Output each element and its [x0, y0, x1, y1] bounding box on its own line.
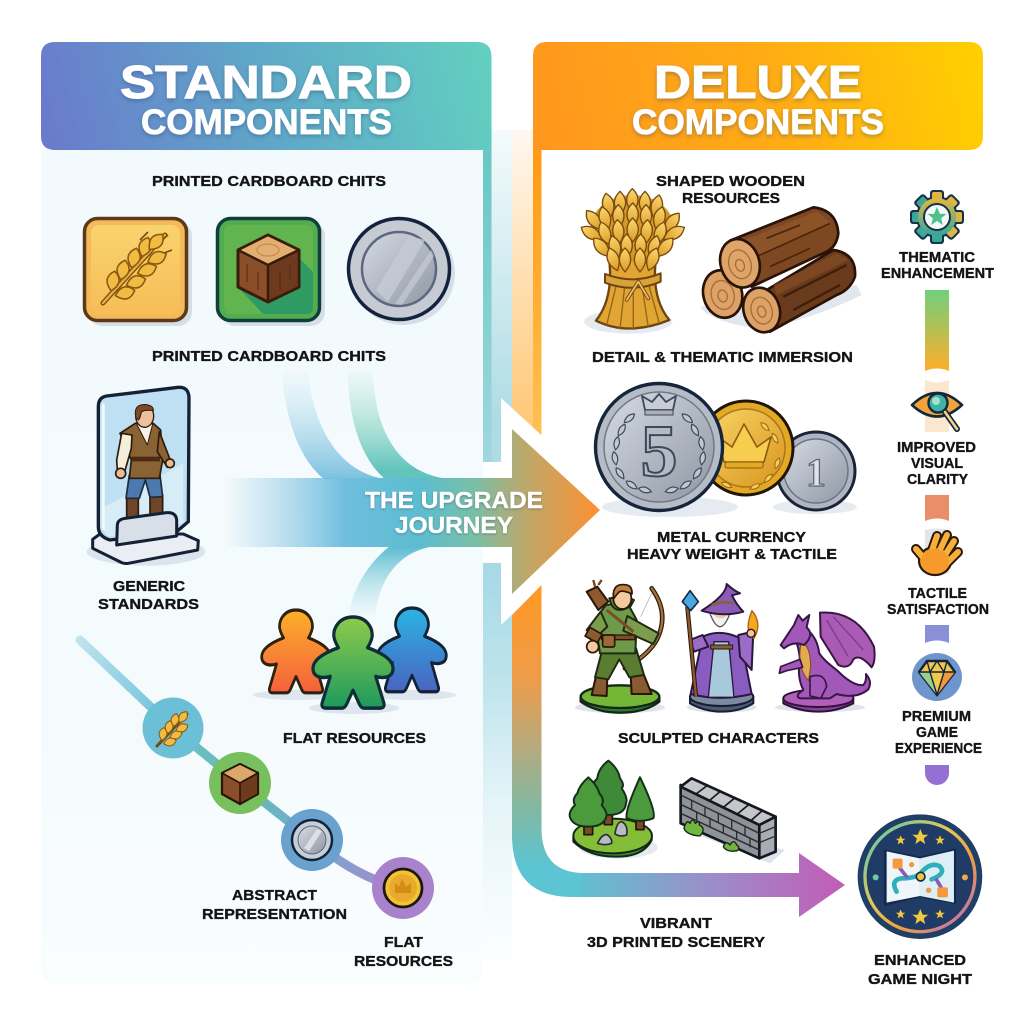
header: standard components [41, 42, 492, 150]
label: enhanced game night: ENHANCED [874, 952, 966, 969]
label: flat resources bottom [354, 934, 453, 970]
coin: silver five: 5 [640, 411, 678, 493]
label: detail and thematic immersion: DETAIL & THEMATIC IMMERSION [592, 349, 853, 366]
icon: silver chit [348, 218, 455, 325]
icon: archer miniature [575, 580, 665, 713]
label: flat resources bottom: FLAT [384, 934, 423, 951]
coin: small silver [777, 432, 855, 510]
coin: silver five [596, 384, 722, 510]
label: thematic enhancement [881, 250, 994, 282]
label: premium game experience: EXPERIENCE [895, 741, 982, 757]
label: shaped wooden resources [656, 173, 805, 207]
node: wood [209, 752, 271, 814]
coin: small silver: 1 [806, 450, 826, 495]
label: metal currency: HEAVY WEIGHT & TACTILE [627, 546, 837, 563]
label: vibrant 3d printed scenery: VIBRANT [640, 915, 712, 932]
label: improved visual clarity: VISUAL [911, 456, 963, 472]
channel: orange upper strip [512, 130, 542, 440]
node: silver coin [281, 809, 343, 871]
connector: violet bar three [925, 625, 949, 643]
label: flat resources bottom: RESOURCES [354, 953, 453, 970]
channel: teal lower strip [483, 563, 512, 960]
icon: wizard miniature [682, 584, 758, 713]
icon: meeples [253, 608, 456, 714]
label: abstract representation [202, 887, 347, 923]
header: standard components: COMPONENTS [141, 103, 392, 142]
header: standard components: STANDARD [120, 56, 412, 108]
icon: dragon miniature [775, 612, 875, 712]
panel: standard components background [41, 150, 483, 984]
label: printed cardboard chits: PRINTED CARDBOARD CHITS [152, 173, 386, 190]
icon: wheat chit [84, 218, 192, 326]
connector: orange bar two [925, 495, 949, 521]
icon: premium diamond [912, 653, 962, 701]
icon: stone wall scenery [681, 778, 785, 863]
label: improved visual clarity [897, 440, 976, 488]
arrow: the upgrade journey: JOURNEY [395, 512, 513, 538]
label: premium game experience: PREMIUM [902, 709, 971, 725]
label: metal currency: METAL CURRENCY [657, 529, 806, 546]
arrow: bottom curve to enhanced game night [512, 585, 845, 917]
coin: gold crown [699, 401, 793, 495]
arrow: the upgrade journey [225, 429, 600, 594]
label: improved visual clarity: CLARITY [907, 472, 968, 488]
node: gold coin [372, 857, 434, 919]
header: deluxe components: DELUXE [654, 56, 862, 108]
icon: generic standee [87, 387, 205, 566]
label: enhanced game night [868, 952, 972, 988]
label: tactile satisfaction: TACTILE [908, 586, 967, 602]
header: deluxe components: COMPONENTS [632, 103, 884, 142]
label: shaped wooden resources: RESOURCES [682, 190, 780, 207]
label: generic standards [98, 578, 199, 613]
label: shaped wooden resources: SHAPED WOODEN [656, 173, 805, 190]
flow: converging streams [282, 372, 450, 615]
icon: tactile hand [916, 528, 958, 576]
label: tactile satisfaction [887, 586, 989, 618]
label: printed cardboard chits second: PRINTED CARDBOARD CHITS [152, 348, 386, 365]
connector: purple bar four [925, 765, 949, 785]
icon: metal coins [596, 384, 857, 517]
label: flat resources: FLAT RESOURCES [283, 730, 426, 747]
connector: gradient bar one [925, 290, 949, 371]
arrow: the upgrade journey: THE UPGRADE [365, 487, 543, 513]
icon: wheat sheaf [578, 189, 687, 334]
icon: gear with star [910, 190, 964, 244]
label: metal currency [627, 529, 837, 563]
icon: eye with magnifier [912, 380, 962, 432]
label: vibrant 3d printed scenery: 3D PRINTED SCENERY [587, 934, 765, 951]
label: improved visual clarity: IMPROVED [897, 440, 976, 456]
node: wheat [142, 698, 204, 758]
label: abstract representation: ABSTRACT [232, 887, 317, 904]
label: premium game experience: GAME [916, 725, 958, 741]
label: thematic enhancement: THEMATIC [899, 250, 976, 266]
label: vibrant 3d printed scenery [587, 915, 765, 951]
label: abstract representation: REPRESENTATION [202, 906, 347, 923]
label: sculpted characters: SCULPTED CHARACTERS [618, 730, 819, 747]
chart: resource timeline [80, 640, 434, 919]
arrow: white outline chevron [501, 398, 623, 625]
icon: enhanced game night badge [858, 814, 982, 939]
label: thematic enhancement: ENHANCEMENT [881, 266, 994, 282]
icon: forest scenery [570, 761, 658, 859]
label: generic standards: GENERIC [113, 578, 185, 595]
icon: wood chit [218, 218, 325, 326]
label: generic standards: STANDARDS [98, 596, 199, 613]
label: enhanced game night: GAME NIGHT [868, 971, 972, 988]
label: tactile satisfaction: SATISFACTION [887, 602, 989, 618]
header: deluxe components [533, 42, 983, 150]
label: premium game experience [895, 709, 982, 757]
icon: wooden logs [698, 207, 862, 337]
channel: teal upper strip [483, 130, 512, 462]
